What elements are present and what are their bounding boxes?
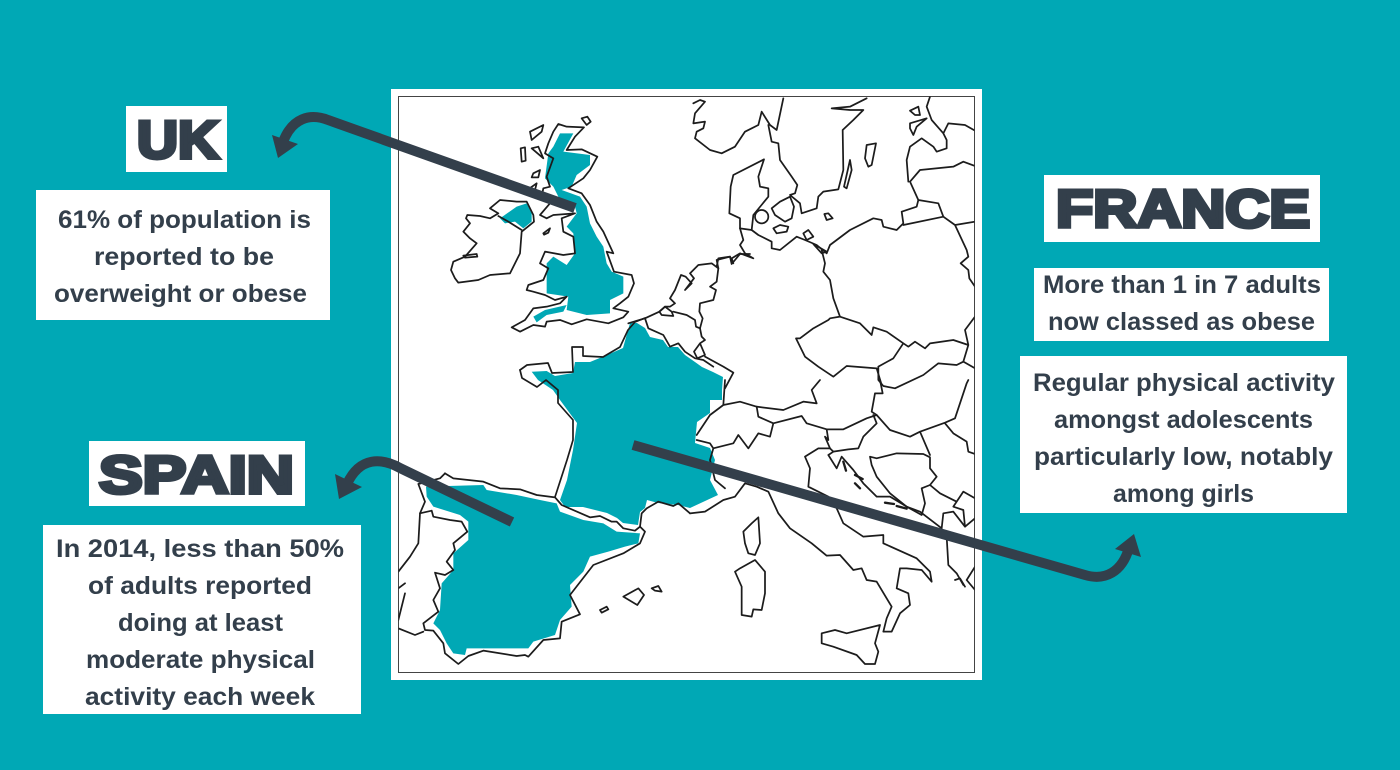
panel: UK statistic [36,190,330,320]
panel: France activity statistic: amongst adolescents [1054,406,1313,434]
panel: Spain heading [89,441,305,506]
panel: Spain statistic: In 2014, less than 50% [56,535,344,563]
panel: Spain statistic: moderate physical [86,646,315,674]
panel: Spain statistic: of adults reported [88,572,312,600]
map: Spain and Portugal [398,473,690,664]
panel: France obesity statistic: now classed as obese [1048,308,1315,336]
panel: France obesity statistic [1034,268,1329,341]
panel: Spain heading: SPAIN [99,446,294,505]
panel: UK statistic: 61% of population is [58,206,311,234]
map: northern and central Europe [693,97,975,388]
panel: Spain statistic: doing at least [118,609,284,637]
panel: Spain statistic [43,525,361,714]
arrow: France [633,445,1141,577]
panel: UK statistic: overweight or obese [54,280,307,308]
map: Italy and the Balkans [690,380,975,664]
panel: France activity statistic: Regular physical activity [1033,369,1335,397]
map: United Kingdom and Ireland [451,117,634,332]
panel: France activity statistic [1020,356,1347,513]
arrow: UK [272,117,575,208]
panel: France obesity statistic: More than 1 in 7 adults [1043,271,1321,299]
panel: UK heading [126,106,227,172]
panel: France activity statistic: particularly low, notably [1034,443,1333,471]
map: France [520,318,723,525]
panel: France activity statistic: among girls [1113,480,1254,508]
panel: UK heading: UK [137,111,219,170]
map: Benelux [628,254,750,367]
arrow: Spain [335,461,512,522]
panel: map of western Europe [391,89,982,680]
panel: Spain statistic: activity each week [85,683,315,711]
panel: UK statistic: reported to be [94,243,274,271]
panel: France heading: FRANCE [1056,180,1310,239]
